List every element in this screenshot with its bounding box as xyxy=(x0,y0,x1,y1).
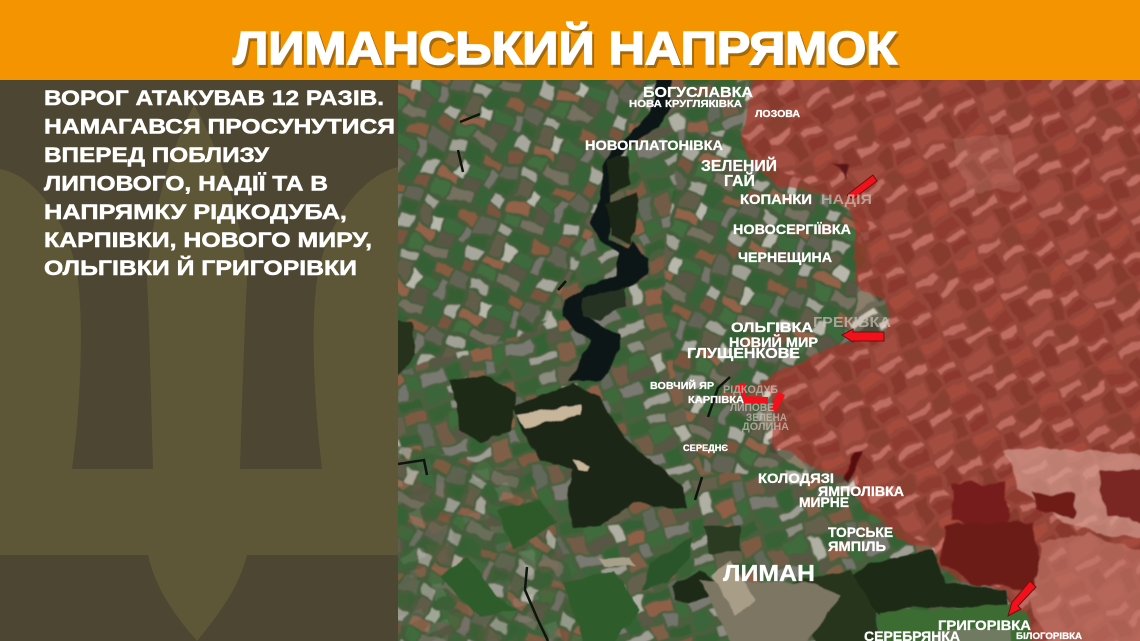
title: Lyman direction: ЛИМАНСЬКИЙ НАПРЯМОК xyxy=(233,22,898,74)
text block: attack summary: ЛИПОВОГО, НАДІЇ ТА В xyxy=(44,172,328,196)
faded occupied settlement labels xyxy=(723,191,891,433)
place name labels: ГРИГОРІВКА xyxy=(938,617,1031,633)
faded occupied settlement labels: ЗЕЛЕНА xyxy=(746,412,787,424)
place name labels: КОПАНКИ xyxy=(740,191,812,207)
place name labels: ТОРСЬКЕ xyxy=(828,524,893,540)
place name labels: ВОВЧИЙ ЯР xyxy=(650,379,714,392)
reservoir: Oskil water xyxy=(563,70,672,381)
place name labels: НОВОСЕРГІЇВКА xyxy=(733,222,851,237)
text block: attack summary: НАПРЯМКУ РІДКОДУБА, xyxy=(44,201,347,224)
place name labels: ЧЕРНЕЩИНА xyxy=(738,250,832,265)
place name labels: НОВОПЛАТОНІВКА xyxy=(585,137,723,153)
place name labels: ЛОЗОВА xyxy=(755,109,800,120)
place name labels: ЯМПОЛІВКА xyxy=(818,483,904,499)
text block: attack summary: НАМАГАВСЯ ПРОСУНУТИСЯ xyxy=(44,116,395,138)
place name labels: ГЛУЩЕНКОВЕ xyxy=(687,345,800,362)
place name labels: ЛИМАН xyxy=(723,560,815,586)
occupied zone overlay xyxy=(740,70,1140,641)
text block: attack summary xyxy=(44,87,395,280)
place name labels: ЗЕЛЕНИЙ xyxy=(701,156,777,175)
text block: attack summary: ВПЕРЕД ПОБЛИЗУ xyxy=(44,144,270,167)
place name labels: ОЛЬГІВКА xyxy=(731,319,813,335)
arrow: Lypove xyxy=(770,392,785,412)
place name labels: ЯМПІЛЬ xyxy=(828,538,886,554)
place name labels: МИРНЕ xyxy=(799,494,849,510)
faded occupied settlement labels: НАДІЯ xyxy=(821,191,872,207)
occupied zone terrain xyxy=(833,135,1140,641)
text block: attack summary: ВОРОГ АТАКУВАВ 12 РАЗІВ. xyxy=(44,87,384,110)
arrow: Hrekivka xyxy=(842,329,884,342)
place name labels: НОВА КРУГЛЯКІВКА xyxy=(629,98,742,110)
text block: attack summary: ОЛЬГІВКИ Й ГРИГОРІВКИ xyxy=(44,256,357,280)
faded occupied settlement labels: ДОЛИНА xyxy=(742,421,789,433)
arrow: Hryhorivka xyxy=(1008,581,1036,616)
place name labels xyxy=(585,84,1082,641)
map base: farmland patchwork xyxy=(370,60,1140,641)
icon: trident watermark xyxy=(0,105,398,641)
faded occupied settlement labels: РІДКОДУБ xyxy=(723,384,778,396)
faded occupied settlement labels: ЛИПОВЕ xyxy=(730,402,774,414)
title: Lyman direction: ЛИМАНСЬКИЙ НАПРЯМОК xyxy=(235,25,900,77)
title bar xyxy=(0,0,1140,80)
forests and terrain xyxy=(390,70,1035,641)
arrow: Karpivka xyxy=(733,382,768,404)
creeks and ponds xyxy=(398,114,730,641)
text block: attack summary: КАРПІВКИ, НОВОГО МИРУ, xyxy=(44,229,372,252)
faded occupied settlement labels: ГРЕКІВКА xyxy=(813,314,891,331)
place name labels: КАРПІВКА xyxy=(688,394,744,406)
place name labels: НОВИЙ МИР xyxy=(729,333,818,350)
place name labels: ГАЙ xyxy=(724,171,755,190)
arrow: Nadiia xyxy=(847,175,877,199)
panel: summary with trident xyxy=(0,87,398,640)
map: Lyman direction satellite view xyxy=(398,80,1140,641)
forest islands xyxy=(582,155,637,320)
place name labels: СЕРЕДНЄ xyxy=(683,443,729,453)
place name labels: КОЛОДЯЗІ xyxy=(758,470,834,486)
place name labels: БОГУСЛАВКА xyxy=(643,84,753,101)
